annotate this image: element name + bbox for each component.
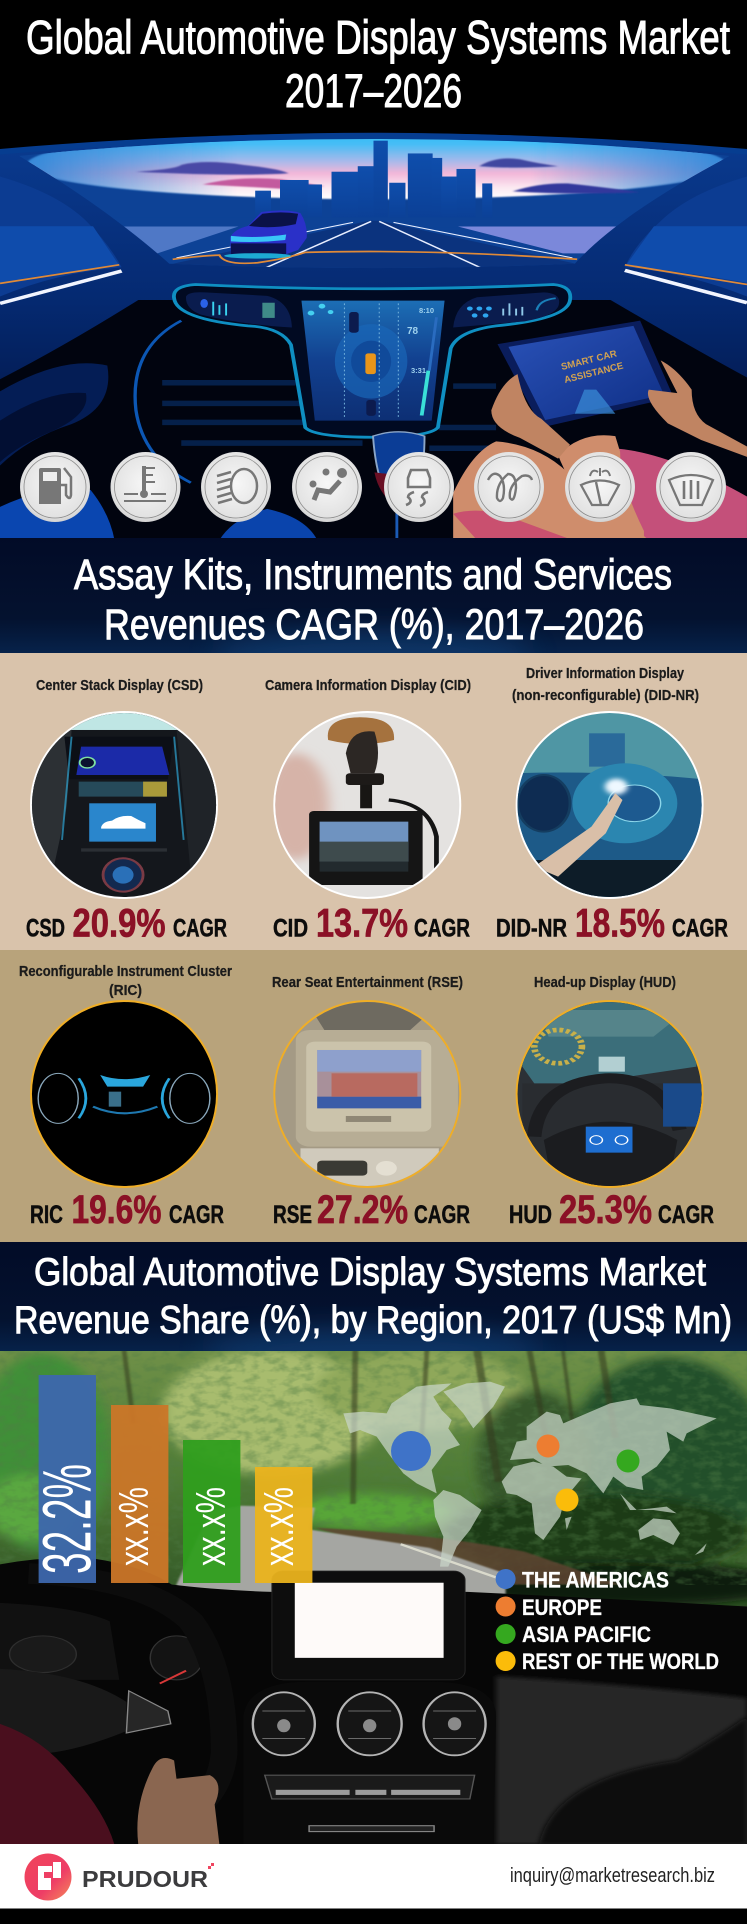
card: driver information display: DID-NR xyxy=(496,915,567,943)
climate controls xyxy=(265,1775,475,1799)
icon: glow plug coil xyxy=(474,452,544,522)
card: center stack display: 20.9% xyxy=(72,902,166,946)
icon: fuel pump xyxy=(20,452,90,522)
passenger skirt right xyxy=(613,448,747,540)
blank white display xyxy=(295,1583,444,1658)
skyline xyxy=(255,140,492,210)
card: reconfigurable instrument cluster: 19.6% xyxy=(72,1188,162,1232)
bar: rest of the world xyxy=(255,1467,312,1583)
icon: air conditioning seat xyxy=(292,452,362,522)
title: 2017–2026 xyxy=(285,64,462,117)
central touchscreen xyxy=(301,301,445,421)
legend xyxy=(496,1568,719,1674)
card: reconfigurable instrument cluster xyxy=(19,963,232,1232)
row of dashboard icons xyxy=(20,452,726,522)
card: rear seat entertainment xyxy=(272,974,470,1232)
forest background xyxy=(0,1350,747,1629)
door swoosh xyxy=(0,363,108,465)
bar: asia pacific xyxy=(183,1440,240,1583)
card: head-up display: HUD xyxy=(509,1201,552,1229)
icon: windshield washer xyxy=(565,452,635,522)
car xyxy=(230,211,307,254)
instrument cluster xyxy=(0,1603,119,1680)
dashboard top edge xyxy=(0,1559,747,1628)
lower cabin dark area xyxy=(0,300,747,540)
icon: skid control xyxy=(384,452,454,522)
right side window xyxy=(625,177,747,297)
card: reconfigurable instrument cluster: CAGR xyxy=(169,1201,224,1229)
screen readouts xyxy=(407,306,434,375)
air vent lines xyxy=(162,383,506,448)
card: head-up display xyxy=(509,974,714,1232)
world map xyxy=(343,1382,717,1567)
bar: asia pacific: xx.x% xyxy=(187,1487,234,1566)
title xyxy=(26,10,730,117)
legend: EUROPE xyxy=(522,1595,602,1620)
center console xyxy=(494,1708,496,1778)
brand name: PRUDOUR xyxy=(82,1866,208,1892)
card: driver information display: (non-reconfigurable) (DID-NR) xyxy=(512,687,699,704)
dark right dash xyxy=(496,1676,747,1845)
card: driver information display: CAGR xyxy=(672,915,728,943)
icon: coolant temperature xyxy=(110,452,180,522)
card: center stack display: CAGR xyxy=(173,915,227,943)
card: camera information display: CID xyxy=(273,915,308,943)
icon: headlight xyxy=(201,452,271,522)
card: head-up display: Head-up Display (HUD) xyxy=(534,974,676,991)
left hand holding tablet xyxy=(491,374,570,459)
card: driver information display: Driver Information Display xyxy=(526,665,685,682)
road xyxy=(176,1506,506,1599)
card: camera information display xyxy=(262,677,471,946)
bar: europe xyxy=(110,1405,168,1583)
sky side fade xyxy=(28,142,724,196)
tablet caption line two: ASSISTANCE xyxy=(563,361,624,386)
left side window xyxy=(0,177,122,297)
passenger skirt left xyxy=(453,511,572,540)
card: rear seat entertainment: RSE xyxy=(273,1201,312,1229)
logo mark xyxy=(24,1854,72,1900)
cockpit body xyxy=(0,133,747,540)
panel: display types row one xyxy=(0,653,747,950)
card: driver information display xyxy=(496,665,728,946)
navigation screen xyxy=(272,1571,465,1680)
map marker: europe xyxy=(536,1434,560,1458)
clouds xyxy=(136,158,639,194)
legend: THE AMERICAS xyxy=(522,1568,669,1592)
tablet xyxy=(498,321,674,428)
section band: region share heading xyxy=(0,1242,747,1374)
passenger legs xyxy=(453,435,649,540)
bar: the americas 32.2%: 32.2% xyxy=(29,1464,106,1574)
card: rear seat entertainment: CAGR xyxy=(414,1201,470,1229)
bar: europe: xx.x% xyxy=(110,1487,157,1566)
screen readouts: 78 xyxy=(407,326,419,337)
foliage texture xyxy=(0,1350,747,1585)
card: center stack display: Center Stack Display (CSD) xyxy=(36,677,203,694)
navigation path xyxy=(173,252,577,263)
bar: rest of the world: xx.x% xyxy=(255,1487,302,1566)
panel: display types row two xyxy=(0,950,747,1242)
card: camera information display: CAGR xyxy=(414,915,470,943)
wine glass xyxy=(373,432,425,507)
card: rear seat entertainment: Rear Seat Entertainment (RSE) xyxy=(272,974,463,991)
bar chart xyxy=(29,1375,312,1583)
screen readouts: 3:31 xyxy=(411,366,426,375)
tree trunks xyxy=(124,1350,615,1504)
steering wheel xyxy=(186,1637,204,1668)
roadside verge xyxy=(315,1528,620,1585)
card: head-up display: 25.3% xyxy=(559,1188,652,1232)
right hand and arm xyxy=(648,360,747,457)
map marker: asia pacific xyxy=(616,1450,640,1472)
windshield view xyxy=(20,139,728,268)
section band: CAGR heading xyxy=(0,538,747,681)
icon: windshield defrost xyxy=(656,452,726,522)
horizon and road xyxy=(0,217,747,228)
card: camera information display: 13.7% xyxy=(316,902,408,946)
right dash display xyxy=(453,292,559,328)
dashboard console outline xyxy=(174,284,570,437)
legend: ASIA PACIFIC xyxy=(522,1622,651,1647)
map marker: the americas xyxy=(391,1431,431,1471)
card: driver information display: 18.5% xyxy=(575,902,665,946)
card: reconfigurable instrument cluster: RIC xyxy=(30,1201,63,1229)
windshield frame top xyxy=(0,133,747,154)
screen readouts: 8:10 xyxy=(419,306,434,315)
map marker: rest of the world xyxy=(556,1488,578,1512)
section band: CAGR heading: Revenues CAGR (%), 2017–2026 xyxy=(104,601,644,649)
card: camera information display: Camera Information Display (CID) xyxy=(265,677,471,694)
hero illustration: car cockpit xyxy=(0,129,747,540)
card: reconfigurable instrument cluster: (RIC) xyxy=(109,982,142,999)
seats xyxy=(0,488,114,540)
air vents xyxy=(253,1692,486,1755)
card: center stack display xyxy=(26,677,227,946)
tablet caption: SMART CAR xyxy=(560,348,618,373)
logo accent xyxy=(208,1863,214,1869)
driver hand and sleeve xyxy=(0,1724,114,1845)
left dash display xyxy=(186,292,292,328)
footer xyxy=(0,1844,747,1908)
card: head-up display: CAGR xyxy=(658,1201,714,1229)
card: reconfigurable instrument cluster: Reconfigurable Instrument Cluster xyxy=(19,963,232,980)
card: center stack display: CSD xyxy=(26,915,65,943)
card: rear seat entertainment: 27.2% xyxy=(317,1188,408,1232)
photo panel: forest road from car interior xyxy=(0,1350,747,1845)
sky glow xyxy=(30,139,722,200)
